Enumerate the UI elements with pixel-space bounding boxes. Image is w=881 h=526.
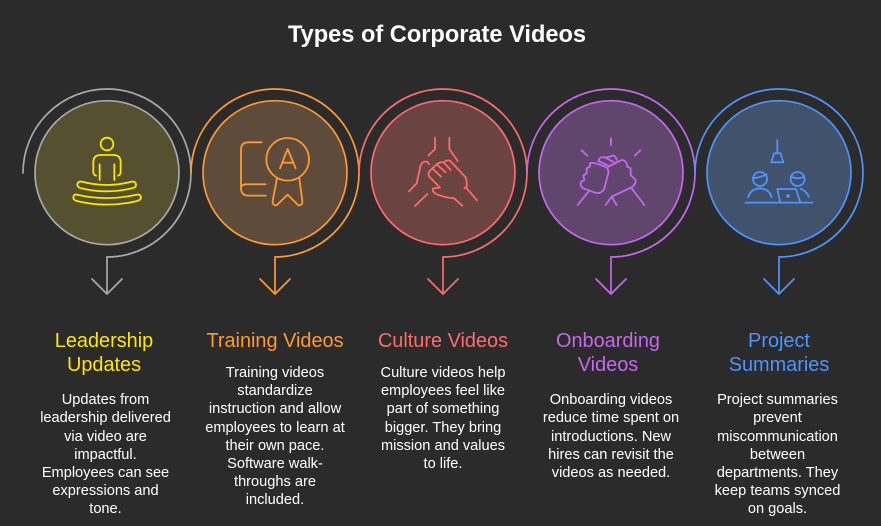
- text: leadership updates: leadership delivered: [40, 410, 171, 426]
- panel: leadership updates: [23, 89, 191, 517]
- heading: culture videos: Culture Videos: [378, 330, 508, 352]
- text: training videos: throughs are: [234, 474, 316, 490]
- text: leadership updates: expressions and: [52, 483, 159, 499]
- text: leadership updates: impactful.: [74, 447, 137, 463]
- circle: training videos: [203, 101, 347, 245]
- text: culture videos: mission and values: [381, 438, 505, 454]
- text: culture videos: to life.: [424, 456, 462, 472]
- text: training videos: Training videos: [226, 365, 324, 381]
- text: project summaries: miscommunication: [717, 429, 838, 445]
- panel: training videos: [191, 89, 359, 508]
- heading: leadership updates: Leadership: [55, 330, 153, 352]
- text: leadership updates: via video are: [64, 429, 147, 445]
- text: training videos: standardize: [237, 383, 313, 399]
- icon: meditating leader: [73, 138, 141, 205]
- circle: leadership updates: [35, 101, 179, 245]
- icon: book and award ribbon: [241, 138, 309, 205]
- text: leadership updates: Employees can see: [42, 465, 169, 481]
- arrow: leadership updates: [23, 89, 191, 294]
- circle: project summaries: [707, 101, 851, 245]
- icon: team meeting with laptop: [746, 140, 813, 203]
- text: culture videos: part of something: [387, 401, 499, 417]
- text: training videos: employees to learn at: [205, 420, 345, 436]
- text: training videos: instruction and allow: [209, 401, 342, 417]
- icon: clasped hands: [578, 138, 644, 205]
- title: Types of Corporate Videos: [288, 22, 586, 48]
- text: project summaries: Project summaries: [717, 392, 838, 408]
- text: culture videos: bigger. They bring: [385, 420, 501, 436]
- arrow: training videos: [191, 89, 359, 294]
- text: onboarding videos: introductions. New: [551, 429, 671, 445]
- arrow: project summaries: [695, 89, 863, 294]
- text: onboarding videos: reduce time spent on: [543, 410, 679, 426]
- text: onboarding videos: Onboarding videos: [550, 392, 672, 408]
- icon: stacked hands: [409, 138, 477, 206]
- heading: training videos: Training Videos: [206, 330, 344, 352]
- text: leadership updates: Updates from: [62, 392, 149, 408]
- text: training videos: Software walk-: [227, 456, 323, 472]
- text: onboarding videos: hires can revisit the: [548, 447, 674, 463]
- text: culture videos: Culture videos help: [381, 365, 505, 381]
- panel: onboarding videos: [527, 89, 695, 481]
- circle: onboarding videos: [539, 101, 683, 245]
- panel: culture videos: [359, 89, 527, 472]
- panel: project summaries: [695, 89, 863, 517]
- circle: culture videos: [371, 101, 515, 245]
- heading: onboarding videos: Onboarding: [556, 330, 660, 352]
- text: onboarding videos: videos as needed.: [552, 465, 670, 481]
- text: project summaries: on goals.: [748, 501, 807, 517]
- heading: project summaries: Project: [748, 330, 810, 352]
- heading: onboarding videos: Videos: [578, 354, 638, 376]
- text: culture videos: employees feel like: [381, 383, 505, 399]
- text: training videos: included.: [246, 492, 304, 508]
- text: project summaries: prevent: [753, 410, 802, 426]
- text: project summaries: departments. They: [717, 465, 839, 481]
- text: training videos: their own pace.: [226, 438, 324, 454]
- heading: project summaries: Summaries: [729, 354, 829, 376]
- heading: leadership updates: Updates: [67, 354, 141, 376]
- arrow: onboarding videos: [527, 89, 695, 294]
- text: project summaries: keep teams synced: [715, 483, 840, 499]
- text: leadership updates: tone.: [89, 501, 122, 517]
- text: project summaries: between: [750, 447, 805, 463]
- arrow: culture videos: [359, 89, 527, 294]
